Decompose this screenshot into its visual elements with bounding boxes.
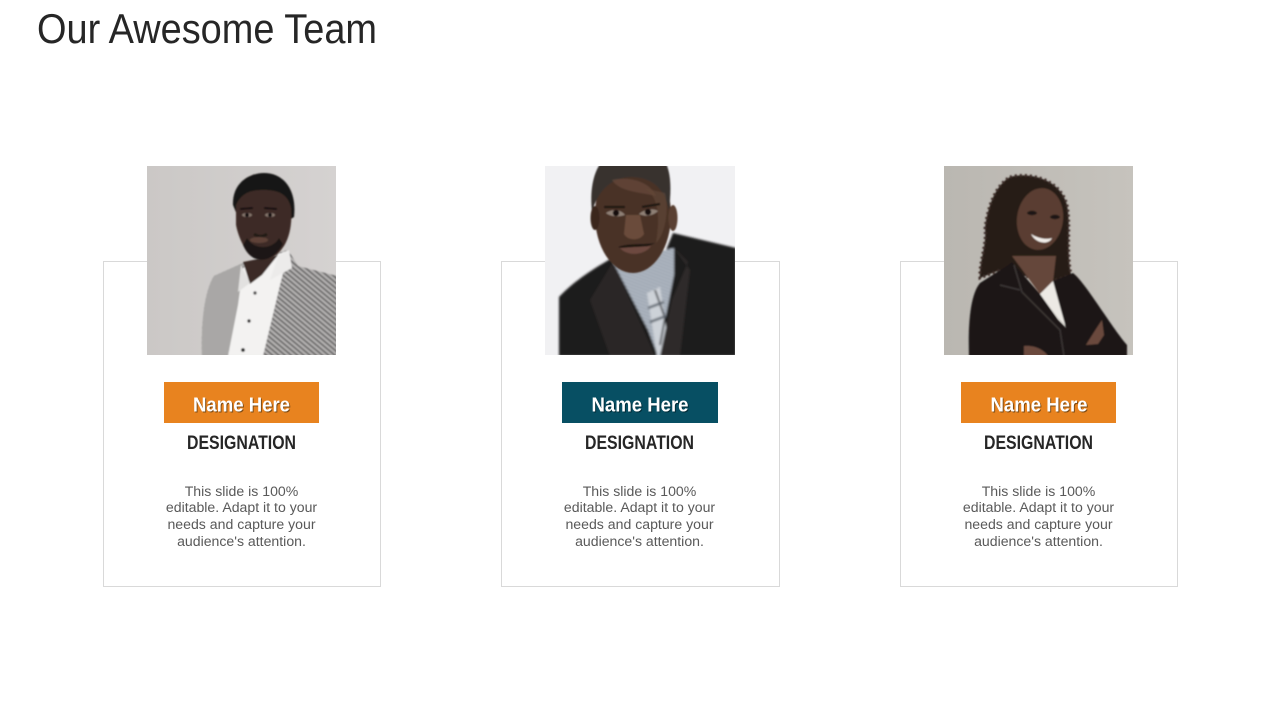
description text: audience's attention. bbox=[177, 533, 306, 549]
card frame bbox=[104, 262, 380, 586]
description text: This slide is 100% bbox=[583, 483, 697, 499]
description text: This slide is 100% bbox=[982, 483, 1096, 499]
description text: editable. Adapt it to your bbox=[166, 499, 317, 515]
description text bbox=[564, 483, 715, 549]
panel: team member 1 bbox=[104, 166, 380, 586]
name banner bbox=[562, 382, 718, 423]
portrait: woman in black blazer bbox=[944, 166, 1133, 356]
card frame bbox=[502, 262, 780, 586]
description text: needs and capture your bbox=[167, 516, 316, 532]
name banner bbox=[961, 382, 1116, 423]
name banner: Name Here bbox=[592, 396, 690, 418]
card frame bbox=[900, 262, 1178, 586]
name banner: Name Here bbox=[990, 394, 1088, 416]
description text: needs and capture your bbox=[964, 516, 1113, 532]
description text bbox=[963, 483, 1114, 549]
description text: This slide is 100% bbox=[185, 483, 299, 499]
description text: audience's attention. bbox=[974, 533, 1103, 549]
name banner: Name Here bbox=[193, 394, 290, 416]
panel: team member 3 bbox=[900, 166, 1178, 586]
panel: team member 2 bbox=[502, 157, 780, 586]
description text: editable. Adapt it to your bbox=[564, 499, 715, 515]
description text bbox=[166, 483, 317, 549]
name banner bbox=[164, 382, 319, 423]
portrait: man in patterned blazer bbox=[147, 166, 337, 356]
description text: audience's attention. bbox=[575, 533, 704, 549]
description text: needs and capture your bbox=[565, 516, 714, 532]
title: Our Awesome Team bbox=[37, 5, 377, 52]
designation: DESIGNATION bbox=[984, 433, 1093, 454]
designation: DESIGNATION bbox=[585, 433, 694, 454]
designation: DESIGNATION bbox=[187, 433, 296, 454]
name banner: Name Here bbox=[194, 396, 291, 418]
name banner: Name Here bbox=[992, 396, 1088, 418]
description text: editable. Adapt it to your bbox=[963, 499, 1114, 515]
portrait: man in dark suit bbox=[545, 157, 736, 356]
name banner: Name Here bbox=[592, 394, 688, 416]
